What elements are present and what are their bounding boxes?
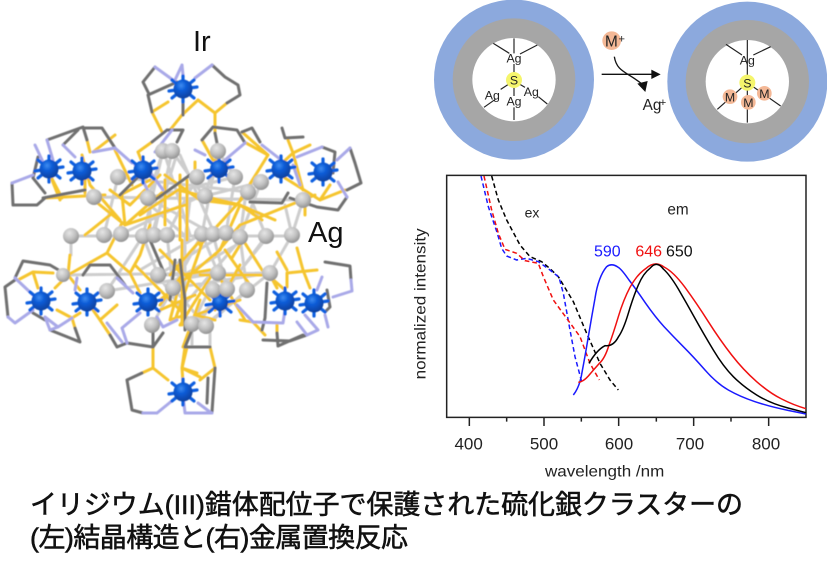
metal exchange reaction scheme — [434, 0, 827, 162]
y axis title: normalized intensity — [413, 228, 430, 379]
series annotations — [525, 201, 693, 261]
cluster before exchange: S — [510, 74, 518, 88]
cluster after exchange: M — [743, 96, 753, 110]
exchange arrows and ions: + — [618, 33, 625, 45]
cluster after exchange: Ag — [740, 53, 755, 67]
spectra chart — [413, 175, 806, 481]
x axis labels: 800 — [752, 434, 780, 453]
silver atoms — [56, 143, 311, 334]
label: Ag: Ag — [308, 217, 343, 249]
x axis title: wavelength /nm — [544, 464, 664, 481]
caption line 2: (左)結晶構造と(右)金属置換反応 — [30, 523, 408, 553]
iridium atoms — [32, 80, 332, 402]
silver-silver bonds — [63, 151, 303, 347]
exchange arrows and ions: Ag — [643, 97, 661, 114]
molecular crystal structure — [5, 65, 361, 413]
caption line 1: イリジウム(III)錯体配位子で保護された硫化銀クラスターの — [30, 490, 743, 520]
cluster after exchange: S — [743, 76, 751, 90]
cluster before exchange — [434, 0, 594, 160]
x axis labels: 700 — [676, 434, 704, 453]
ligand carbon bonds — [5, 65, 361, 413]
emission solid curves — [573, 264, 806, 414]
series annotations: 646 — [635, 244, 662, 261]
cluster before exchange: Ag — [485, 88, 500, 102]
x axis labels: 400 — [454, 434, 483, 453]
x axis labels — [454, 434, 780, 453]
cluster after exchange: M — [759, 87, 769, 101]
exchange arrows and ions: + — [660, 97, 667, 109]
cluster before exchange: Ag — [524, 85, 539, 99]
series annotations: em — [667, 201, 689, 218]
sulfur bonds — [18, 100, 345, 383]
cluster after exchange: M — [725, 90, 735, 104]
x axis labels: 600 — [605, 434, 633, 453]
plot frame and ticks — [447, 175, 806, 426]
cluster after exchange — [667, 2, 827, 162]
excitation dashed curves — [481, 176, 618, 390]
series annotations: ex — [525, 205, 539, 221]
series annotations: 650 — [666, 244, 693, 261]
exchange arrows and ions: M — [605, 33, 618, 50]
ligand nitrogen bonds — [8, 65, 352, 413]
cluster before exchange: Ag — [506, 95, 522, 109]
cluster before exchange: Ag — [506, 51, 522, 65]
label: Ir: Ir — [193, 26, 211, 58]
exchange arrows and ions — [602, 31, 667, 114]
iridium bonds — [27, 76, 337, 405]
x axis labels: 500 — [530, 434, 558, 453]
series annotations: 590 — [594, 244, 621, 261]
